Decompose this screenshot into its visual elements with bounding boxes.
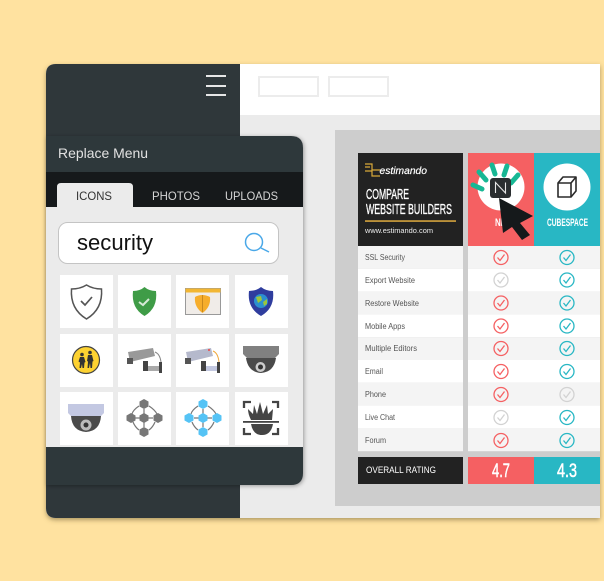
column header: CubeSpace: [534, 153, 600, 246]
feature rows: Multiple Editors: [365, 344, 417, 353]
icon: globe shield: [249, 287, 273, 316]
icon: coloured cctv camera: [185, 348, 220, 373]
feature rows: Live Chat: [365, 413, 396, 422]
overall rating row: 4.7: [492, 460, 510, 482]
icon: blue network: [184, 399, 222, 437]
table header: title block: WEBSITE BUILDERS: [366, 201, 452, 218]
feature rows: Mobile Apps: [365, 322, 405, 331]
overall rating row: OVERALL RATING: [366, 465, 436, 476]
icon: handprint scan: [243, 402, 279, 435]
check marks: first builder: [494, 250, 508, 448]
tab bar: ICONS: [76, 189, 112, 203]
panel: comparison table: [335, 130, 600, 506]
search box: security: [77, 230, 153, 255]
heading: Replace Menu: Replace Menu: [58, 145, 148, 161]
icon: N badge: [490, 178, 511, 198]
table header: title block: estimando: [380, 165, 427, 177]
icon: grey cctv camera: [127, 348, 162, 373]
icon: hamburger menu: [206, 75, 226, 96]
icon: cursor arrow: [499, 198, 533, 240]
column header: first builder: [468, 153, 534, 246]
feature rows: Phone: [365, 390, 386, 399]
dark sidebar: [46, 64, 240, 518]
tab bar: UPLOADS: [225, 189, 278, 203]
top toolbar: [240, 64, 600, 115]
tab bar: PHOTOS: [152, 189, 200, 203]
feature rows: Export Website: [365, 276, 415, 285]
column header: first builder: NI: [495, 217, 503, 229]
overall rating row: [358, 457, 600, 484]
icon: light dome camera: [68, 404, 104, 432]
feature rows: Forum: [365, 436, 386, 445]
click highlight with N badge and cursor: [473, 165, 533, 240]
icon: shield outline: [71, 285, 102, 319]
icon: click burst: [473, 165, 518, 189]
feature rows: Email: [365, 367, 383, 376]
table header: title block: [358, 153, 463, 246]
feature rows: Restore Website: [365, 299, 419, 308]
app window: [46, 64, 600, 518]
table header: title block: COMPARE: [366, 186, 409, 203]
icon: grey dome camera: [243, 346, 279, 373]
icon: green shield: [133, 287, 156, 316]
overall rating row: 4.3: [557, 460, 577, 482]
icon grid: [60, 275, 288, 445]
tab bar: [46, 172, 303, 207]
icon: grey network: [126, 399, 162, 437]
panel body: [46, 207, 303, 447]
table header: title block: www.estimando.com: [364, 226, 433, 235]
feature rows: SSL Security: [365, 253, 405, 262]
icon: cube: [558, 177, 576, 197]
panel: replace menu: [46, 136, 303, 485]
icon: browser shield: [186, 288, 220, 314]
icon: magnifier: [246, 234, 269, 252]
feature rows: [358, 246, 600, 451]
icon: estimando logo: [365, 164, 380, 176]
search box: [58, 222, 278, 264]
check marks: CubeSpace: [560, 250, 574, 448]
icon: school crossing sign: [72, 346, 100, 374]
